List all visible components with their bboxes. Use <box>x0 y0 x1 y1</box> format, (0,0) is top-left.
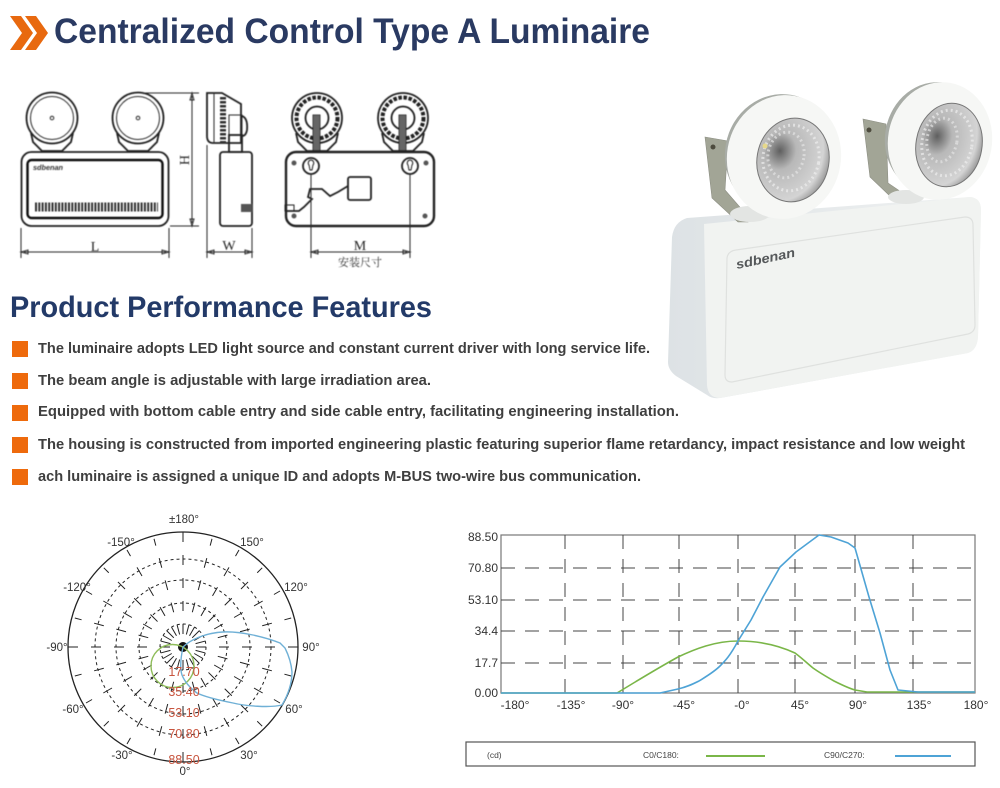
chart legend: C90/C270: <box>824 750 865 760</box>
chart legend: (cd) <box>487 750 502 760</box>
feature 1: The luminaire adopts LED light source and constant current driver with long service life. <box>38 340 650 357</box>
front view <box>22 92 168 226</box>
dimension label: W: W <box>222 239 236 254</box>
right lamp bracket <box>863 119 907 200</box>
x axis labels: 135° <box>907 698 932 712</box>
front view: sdbenan <box>33 165 63 172</box>
x axis labels: -0° <box>734 698 750 712</box>
chart legend: C0/C180: <box>643 750 679 760</box>
angle labels: -90° <box>46 642 68 654</box>
x axis labels: 90° <box>849 698 867 712</box>
radial scale labels: 53.10 <box>168 706 200 720</box>
x axis labels: -180° <box>501 698 530 712</box>
y axis labels: 34.4 <box>475 624 498 638</box>
polar light distribution chart <box>46 514 320 778</box>
left lamp head <box>715 85 851 228</box>
radial scale labels: 70.80 <box>168 727 200 741</box>
rear view <box>285 93 434 226</box>
x axis labels <box>501 698 989 712</box>
x axis labels: 180° <box>964 698 989 712</box>
icon: double chevron <box>10 16 48 50</box>
chart legend <box>466 742 975 766</box>
luminaire body <box>668 197 981 398</box>
angle labels: 0° <box>180 766 190 778</box>
brand logo: sdbenan <box>735 245 796 272</box>
y axis labels: 0.00 <box>475 686 498 700</box>
curve: C0/C180 <box>151 644 194 688</box>
dimension label: L: L <box>91 240 99 255</box>
right lamp head <box>876 74 1000 208</box>
x axis labels: -45° <box>673 698 695 712</box>
feature list <box>12 340 965 485</box>
angle labels: 120° <box>284 582 308 594</box>
feature 5: ach luminaire is assigned a unique ID and adopts M-BUS two-wire bus communication. <box>38 468 641 485</box>
angle labels: ±180° <box>169 514 199 526</box>
technical drawing: front, side and rear views <box>21 92 434 269</box>
curve: C90/C270 <box>181 632 292 706</box>
curve: C90/C270 <box>501 535 975 693</box>
mounting dimension caption: 安装尺寸 <box>338 255 382 269</box>
angle labels: -120° <box>63 582 91 594</box>
y axis labels: 53.10 <box>468 593 498 607</box>
angle labels: 60° <box>285 704 303 716</box>
radial scale labels: 35.40 <box>168 685 200 699</box>
x axis labels: -135° <box>557 698 586 712</box>
angle labels: 30° <box>240 750 258 762</box>
angle labels: 150° <box>240 537 264 549</box>
feature 3: Equipped with bottom cable entry and side cable entry, facilitating engineering installation. <box>38 403 679 420</box>
radial scale labels: 17.70 <box>168 665 200 679</box>
side view <box>207 93 252 226</box>
feature 2: The beam angle is adjustable with large irradiation area. <box>38 372 431 389</box>
feature 4: The housing is constructed from imported engineering plastic featuring superior flame retardancy, impact resistance and low weight <box>38 436 965 453</box>
left lamp bracket <box>705 137 748 222</box>
heading: features: Product Performance Features <box>10 291 432 324</box>
line chart: candela vs angle <box>468 530 989 712</box>
radial scale labels <box>168 665 200 767</box>
y axis labels <box>468 530 498 700</box>
y axis labels: 88.50 <box>468 530 498 544</box>
curve: C0/C180 <box>501 641 975 693</box>
angle labels: -150° <box>107 537 135 549</box>
title: Centralized Control Type A Luminaire <box>54 12 650 51</box>
dimension label: H: H <box>178 155 193 165</box>
product photo: twin-head luminaire <box>668 74 1000 398</box>
angle labels <box>46 514 320 778</box>
x axis labels: -90° <box>612 698 634 712</box>
radial scale labels: 88.50 <box>168 753 200 767</box>
y axis labels: 17.7 <box>475 656 498 670</box>
angle labels: -30° <box>111 750 133 762</box>
dimension lines <box>21 93 410 258</box>
x axis labels: 45° <box>791 698 809 712</box>
screw heads <box>710 128 872 150</box>
angle labels: 90° <box>302 642 320 654</box>
dimension label: M: M <box>354 239 367 254</box>
angle labels: -60° <box>62 704 84 716</box>
y axis labels: 70.80 <box>468 561 498 575</box>
